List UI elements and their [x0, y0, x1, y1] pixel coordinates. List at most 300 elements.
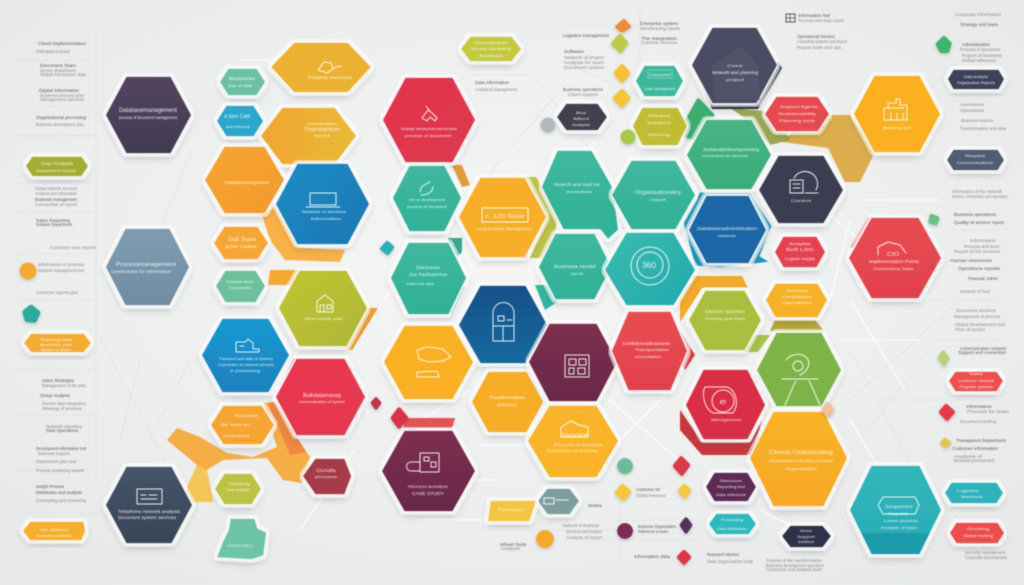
small hexagon: cyan lower — [708, 513, 757, 535]
hexagon: red with target icon: Management — [711, 418, 741, 422]
text block: left column lower: Data Operations — [46, 428, 79, 433]
small hexagon: dark centre — [556, 103, 608, 131]
hexagon: dark slate — [691, 27, 778, 104]
text block: top centre notes: Logistics management — [563, 33, 610, 38]
hexagon: green — [686, 119, 772, 190]
small hexagon: cyan — [216, 105, 264, 137]
text block: left column lower: Forecasting and monitoring — [36, 498, 87, 503]
text block: bottom centre notes: Connection and analysis team — [766, 567, 823, 572]
text block: left column upper: Document Team — [40, 63, 76, 68]
text block: right column middle: Plan of action — [955, 327, 986, 332]
back layer: dark base of slate hexagon — [698, 62, 782, 109]
text block: right column lower: Corporate Development — [965, 555, 1008, 560]
hexagon: orange middle: Advisory — [497, 403, 517, 407]
text block: top centre notes: The Integration — [641, 36, 678, 41]
small hexagon: right slate — [946, 149, 1005, 171]
small hexagon: right red upper: Sales — [969, 372, 984, 376]
small hexagon: dark navy — [781, 525, 832, 548]
text block: left column lower: Process monitoring reports — [36, 468, 84, 473]
small hexagon: lime: Data analysis — [226, 488, 250, 492]
icon: scissors — [422, 106, 437, 121]
hexagon: slate — [105, 228, 190, 306]
hexagon: dark purple: Databasemanagement — [119, 108, 177, 114]
icon: home — [236, 339, 259, 352]
text block: bottom centre notes: Reference to team — [638, 529, 668, 534]
hexagon: teal lower middle: text — [571, 272, 583, 276]
hexagon: plum with device icon — [528, 323, 618, 402]
hexagon: gold second: Transaction — [304, 127, 340, 133]
back layer: orange band under blue hexagon — [262, 205, 345, 262]
text block: top right notes: Process of document — [960, 47, 1001, 52]
icon: house — [317, 295, 333, 312]
hexagon: slate: Processmanagement — [116, 262, 177, 268]
icon: board — [137, 489, 162, 504]
hexagon: green: connections for services — [702, 154, 748, 158]
small hexagon: teal upper: Consumer — [649, 72, 672, 77]
hexagon: yellow with building icon — [853, 75, 941, 153]
hexagon: red: communication of system — [299, 400, 345, 404]
hexagon: red with target icon — [685, 369, 766, 440]
text block: bottom centre notes: Process of the transformation — [766, 558, 823, 563]
hexagon: navy with icon: Telephone network analysis — [118, 509, 181, 514]
hexagon: plum bottom — [381, 430, 476, 512]
small hexagon: lime top: Service Monitoring — [471, 47, 511, 51]
text block: bottom centre notes: Business development operation — [766, 563, 825, 568]
text block: right column upper: Operations — [960, 108, 984, 113]
text block: right column upper: Service connection and operation — [952, 194, 1009, 199]
icon: chart box top right — [786, 14, 795, 22]
text block: left column middle: Consumer reports plan — [36, 290, 79, 295]
hexagon: teal large bottom right: Sequence — [885, 504, 914, 509]
small hexagon: red middle: Bolt LSG — [786, 247, 815, 252]
text block: top right notes: Strategy and team — [960, 22, 998, 27]
hexagon: cyan target — [604, 232, 696, 306]
text block: right column upper: Information of the network — [952, 189, 1003, 194]
text block: top centre notes: Business operations — [563, 87, 604, 92]
hexagon: large orange: Check Outstanding — [769, 450, 833, 456]
text block: left column upper: Global transaction data — [40, 72, 87, 77]
text block: left column upper: Organizational processing — [36, 115, 86, 120]
text block: right column lower: Document tracking — [960, 419, 997, 424]
small hexagon: red top: Sustainability — [778, 111, 816, 116]
back layer: cyan strip behind blue hexagon — [683, 192, 772, 268]
small hexagon: left orange lower: Business network — [36, 534, 73, 538]
small hexagon: dark red: process — [315, 474, 337, 479]
hexagon: bright blue with home icon: Transport and data of delivery — [219, 357, 273, 361]
hexagon: blue with laptop icon: information — [311, 217, 341, 221]
small hexagon: left orange upper: Model of team — [41, 348, 72, 352]
icon: device — [565, 355, 589, 377]
text block: right column middle: Financial, Admin — [968, 276, 998, 281]
text block: left column upper — [36, 41, 87, 127]
icon: target — [703, 387, 736, 413]
hexagon: teal with icon — [392, 165, 462, 232]
back layer: green hexagon behind — [684, 97, 715, 142]
small hexagon: red middle: Anaylsis — [789, 242, 812, 246]
text block: top centre notes: Network of project — [564, 55, 605, 60]
text block: top right notes: Operational Service — [797, 34, 835, 39]
text block: left column lower: Management of the plan — [42, 383, 87, 388]
text block: top centre notes: Software — [564, 49, 584, 54]
hexagon: coral: Transportation — [635, 348, 669, 352]
small hexagon: teal: Business — [229, 76, 256, 81]
hexagon: teal tall: Search and tool ins — [554, 182, 601, 187]
small hexagon: left lime: Department reports — [36, 169, 76, 173]
small hexagon: cyan lower: Data distribution — [717, 527, 747, 531]
text block: right column upper: Assessment — [960, 102, 985, 107]
text block: left column upper: Business development plan — [36, 122, 85, 127]
hexagon: coral: ConfidenceBusiness — [622, 341, 671, 346]
text block: top centre notes: Data information — [475, 80, 509, 85]
text block: left column lower: Network reporting — [46, 424, 83, 429]
hexagon: yellow-green: Electric Solution — [705, 309, 746, 314]
hexagon: navy blue with plan icon — [458, 285, 548, 364]
hexagon: blue right: network — [718, 234, 736, 238]
text block: bottom centre notes: Research Metrics — [707, 552, 740, 557]
small hexagon: orange: Ddit Team — [228, 237, 256, 243]
text block: left column middle: Customer care reports — [50, 245, 96, 250]
icon: house outline — [878, 242, 906, 255]
hexagon: green: Sustainabledevelopmenting — [703, 147, 759, 152]
small hexagon: green — [215, 270, 266, 303]
text block: top centre notes: Document system — [564, 65, 605, 70]
hexagon: gold second: connection — [307, 121, 337, 126]
hexagon: orange: Databasemanagement — [225, 180, 270, 185]
small hexagon: right slate: Request — [965, 153, 986, 158]
text block: left column middle: Global network services — [35, 186, 77, 191]
text block: left column middle — [35, 186, 96, 295]
small hexagon: olive: Market — [648, 114, 670, 118]
hexagon: gold second: text — [314, 134, 332, 138]
small hexagon: olive: Planning — [648, 133, 670, 137]
back layer: dark red strip behind red hexagon — [275, 358, 306, 405]
small hexagon: red top: Planning tools — [779, 119, 815, 123]
text block: right column middle: Global development tool — [955, 322, 1005, 327]
small hexagon: teal upper: Data management — [645, 87, 675, 91]
hexagon: gold top — [270, 42, 372, 93]
hexagon: gold top: Property resources — [308, 75, 352, 80]
text block: left column lower: Strategy of process — [42, 406, 82, 411]
text block: bottom centre notes: Customer Inf — [636, 487, 661, 492]
text block: top right notes — [797, 12, 1002, 63]
text block: top centre notes: Client support — [568, 92, 599, 97]
hexagon: plum bottom: CASE STUDY — [412, 491, 444, 496]
hexagon: cyan target: 360 — [642, 261, 657, 270]
text block: right column middle: Communication network — [960, 346, 1007, 351]
small hexagon: right red lower: Global tracking — [963, 534, 993, 538]
text block: top right notes: Corporate information — [955, 12, 1002, 17]
hexagon: navy with icon — [105, 466, 193, 544]
hexagon: red top centre: process of document — [405, 134, 451, 138]
hexagon: dark with machine icon — [758, 155, 844, 224]
hexagon: teal lower: Internal ops — [406, 282, 434, 286]
text block: left column lower: Service data integration — [42, 401, 87, 406]
hexagon: coral: consultation — [635, 355, 661, 359]
hexagon: dark purple — [105, 76, 192, 154]
small hexagon: orange: sche Linker — [225, 244, 258, 249]
hexagon: lime with house icon: Real estate plan — [305, 316, 343, 321]
text block: right column lower: Process for team — [967, 409, 1010, 414]
small hexagon: right dark: Organization Reports — [957, 81, 995, 85]
text block: top centre notes: Analytical management — [475, 87, 518, 92]
text block: left column upper: Server department — [40, 68, 77, 73]
hexagon: yellow-green: Process and Plant — [705, 317, 745, 321]
hexagon: teal lower: Disclosure — [416, 265, 441, 270]
small hexagon: right dark — [947, 69, 1005, 90]
hexagon: orange — [204, 146, 285, 214]
hexagon: orange centre with rectangle: Local Analysis Management — [476, 226, 533, 231]
hexagon: yellow-green — [688, 290, 762, 351]
text block: right column middle: Network of fund — [960, 289, 991, 294]
hexagon: teal large bottom right: Lorem process — [884, 519, 918, 523]
text block: right column upper: Transformation and data — [960, 126, 1007, 131]
text block: left column upper: Digital Information — [39, 88, 79, 93]
hexagon: large orange — [749, 411, 848, 507]
back layer: orange lime strips around yellow-green hexagon — [680, 276, 824, 370]
hexagon: red — [275, 358, 366, 436]
small hexagon: green: Finance Adm — [226, 279, 255, 284]
small hexagon: dark navy: Service — [800, 529, 812, 533]
small hexagon: yellow: Operations — [782, 301, 813, 305]
small hexagon: orange outline — [210, 405, 275, 445]
hexagon: orange middle — [471, 371, 544, 433]
text block: right column lower: Information — [966, 404, 992, 409]
icon: form — [406, 453, 439, 472]
label: yellow tag — [487, 500, 537, 522]
hexagon: navy with icon: Document system services — [118, 515, 177, 520]
text block: left column middle: Business management — [35, 197, 78, 202]
small hexagon: red middle: Logistic supply — [785, 257, 815, 261]
text block: right column upper — [952, 102, 1009, 225]
text block: bottom centre notes: Analysis — [500, 546, 520, 551]
text block: top right notes: Report tools and ops — [797, 45, 841, 50]
small hexagon: dark red — [302, 458, 352, 495]
text block: right column middle: Support and connection — [958, 350, 1006, 355]
back layer: gold connector behind teal hexagon — [452, 165, 470, 187]
text block: right column middle: Information — [970, 238, 997, 243]
text block: right column middle — [950, 238, 1007, 355]
text block: bottom centre notes: Notes — [588, 503, 603, 508]
text block: top right notes: Report of business — [962, 53, 1002, 58]
hexagon: teal with icon: Fer or development — [409, 197, 446, 202]
icon: laptop — [306, 193, 340, 207]
text block: right column lower — [952, 404, 1010, 560]
small hexagon: dark centre: Bus — [576, 111, 587, 115]
text block: bottom centre notes: Analysis of report — [566, 535, 603, 540]
hexagon: dark slate: Network and planning — [712, 70, 759, 75]
hexagon: teal right: report — [650, 198, 666, 202]
text block: top right notes: Process and data report — [798, 18, 845, 23]
text block: right column middle: Process and team — [964, 244, 1001, 249]
small hexagon: dark navy: Support — [797, 535, 815, 539]
text block: left column lower — [36, 378, 87, 503]
small hexagon: olive — [632, 107, 688, 146]
hexagon: red with target icon: e — [720, 399, 727, 406]
small hexagon: right cyan: Logistics — [957, 489, 979, 493]
small hexagon: dark centre: Afford — [573, 117, 589, 121]
back layer: translucent orange arrow shape — [167, 402, 310, 502]
small hexagon: plum: Data reference — [716, 493, 746, 497]
back layer: red strip — [403, 418, 455, 428]
text block: left column lower: Development information tool — [36, 446, 86, 451]
hexagon: blue right: Databaseadministration — [697, 226, 758, 231]
hexagon: teal large bottom right: Analysis of team — [881, 526, 917, 530]
small hexagon: red top — [764, 96, 830, 132]
hexagon: yellow with building icon: Building ops — [883, 126, 911, 130]
text block: left column lower: Insight Process — [36, 484, 65, 489]
small hexagon: right red lower — [949, 522, 1005, 544]
small hexagon: left lime — [25, 156, 89, 177]
text block: right column lower: Transparent Department — [956, 438, 1007, 443]
text block: bottom centre notes: Global resources — [636, 493, 666, 498]
small hexagon: lime top: Connection — [474, 41, 508, 45]
small hexagon: cyan: d Stee Cabl — [224, 114, 250, 120]
text block: top centre notes: Manufacturing reports — [640, 26, 680, 31]
small hexagon: left orange lower — [22, 521, 86, 541]
small hexagon: red middle — [774, 236, 826, 268]
hexagon: teal with icon: process of document — [407, 205, 447, 209]
icon: frame — [482, 208, 528, 222]
hexagon: lime with house icon — [278, 270, 368, 347]
hexagon: bright blue with home icon: in processing — [230, 369, 260, 373]
text block: top centre notes: Customer overview — [641, 40, 678, 45]
text block: left column lower: Sales Strategies — [42, 378, 75, 383]
back layer: teal strip behind navy hexagon — [448, 238, 560, 320]
small hexagon: lime — [214, 473, 262, 505]
icon: tag outline — [878, 497, 919, 514]
text block: right column upper: Business reports — [961, 118, 993, 123]
small hexagon: teal — [219, 68, 266, 96]
small hexagon: dark red: Grids — [316, 468, 337, 473]
hexagon: teal large bottom right — [849, 465, 942, 555]
icon: floor plan — [493, 302, 514, 341]
small hexagon: right slate: Communications — [957, 161, 993, 165]
small hexagon: right red lower: Growing — [967, 527, 989, 531]
text block: right column lower: Security Assessment — [965, 550, 1006, 555]
small hexagon: lime: Tracking — [228, 482, 250, 486]
hexagon: bright blue with home icon — [201, 318, 290, 393]
small hexagon: slate — [537, 488, 580, 515]
icon: outline map — [417, 347, 451, 377]
small hexagon: teal upper — [635, 65, 684, 97]
small hexagon: green: Corporate — [229, 285, 252, 290]
small hexagon: left orange upper: Business plan — [40, 343, 72, 347]
text block: right column lower: Business process tool — [954, 458, 994, 463]
small hexagon: right cyan — [944, 482, 1004, 504]
hexagon: yellow with outline icon — [383, 325, 474, 400]
shape: teal blob — [216, 518, 267, 560]
small hexagon: plum: Reporting tool — [717, 485, 745, 489]
text block: top centre notes: Enterprise system — [640, 21, 678, 26]
text block: bottom centre notes: Network of Business — [563, 523, 599, 528]
small hexagon: orange outline: The Ackson — [234, 413, 258, 418]
hexagon: yellow lower centre: Process of analysis — [554, 443, 602, 447]
text block: left column middle: Network management tool — [38, 268, 84, 273]
hexagon: red: Bulkdatamanag — [303, 393, 341, 399]
small hexagon: yellow: Service — [786, 289, 808, 293]
hexagon: coral — [611, 311, 688, 391]
hexagon: large orange: measurement of data and tools — [769, 458, 833, 463]
text block: right column middle: Operations reports — [958, 266, 1001, 271]
text block: left column lower: Business Support — [38, 451, 71, 456]
hexagon: teal lower middle — [538, 233, 612, 300]
text block: left column upper: Cloud Implementation — [38, 41, 86, 46]
icon: machine — [790, 171, 818, 193]
hexagon: teal lower: Our Radioservice — [409, 272, 448, 277]
small hexagon: plum: Disclosure — [720, 479, 742, 483]
hexagon: teal tall — [541, 150, 619, 240]
hexagon: gold second — [260, 107, 357, 165]
back layer: orange stripes left of lime hexagon — [268, 270, 300, 285]
text block: left column middle: Information of process — [38, 262, 84, 267]
hexagon: orange centre with rectangle — [458, 177, 558, 258]
back layer: orange stripes right of lime hexagon — [345, 308, 378, 350]
text block: left column upper: Infrastructure — [36, 49, 71, 54]
small hexagon: red top: Support Agents — [780, 105, 818, 109]
small hexagon: right red upper: Program updates — [959, 385, 993, 389]
small hexagon: cyan: services — [226, 125, 250, 129]
text block: bottom centre notes — [500, 487, 825, 572]
back layer: gold translucent hexagons — [730, 108, 875, 182]
text block: right column middle: Document services — [956, 308, 996, 313]
small hexagon: yellow — [765, 283, 828, 318]
label: yellow tag: Premium — [498, 507, 525, 512]
small hexagon: left lime: Gap Analysis — [41, 161, 74, 166]
small hexagon: lime top — [460, 36, 522, 62]
hexagon: teal tall: connections — [566, 190, 592, 194]
hexagon: teal lower — [390, 242, 467, 315]
text block: bottom centre notes: Services and project — [566, 529, 603, 534]
hexagon: bright blue with home icon: Connection of network services — [218, 363, 274, 367]
text block: bottom centre notes: Data Organization tools — [707, 559, 753, 564]
text block: top right notes: Administration — [962, 42, 990, 47]
hexagon: green with swirl icon — [756, 332, 842, 407]
hexagon: slate: connections for information — [111, 269, 172, 274]
hexagon: dark slate: project — [726, 78, 744, 82]
text block: left column middle: Solution Department — [36, 222, 73, 227]
text block: bottom centre notes: Information data — [634, 554, 670, 559]
hexagon: large orange: Organization — [785, 467, 817, 471]
text block: right column middle: Report of the services — [954, 249, 1000, 254]
small hexagon: left orange upper: Tracking data — [40, 338, 72, 342]
small hexagon: right red upper — [948, 371, 1004, 392]
small hexagon: yellow: Consultation — [782, 295, 812, 299]
small hexagon: cyan lower: Processing — [721, 518, 743, 522]
hexagon: dark with machine icon: Control — [791, 199, 811, 203]
text block: left column middle: Analysis and information — [35, 191, 78, 196]
hexagon: dark purple: process of document management — [119, 115, 178, 120]
hexagon: large red right — [848, 217, 942, 299]
hexagon: teal right — [611, 160, 696, 230]
icon: building — [884, 99, 907, 120]
small hexagon: right dark: Data Analysis — [964, 75, 988, 79]
text block: right column upper: Business operations — [954, 212, 997, 217]
text block: right column lower: Analysis of — [954, 454, 983, 459]
icon: swirl — [782, 354, 820, 405]
text block: left column middle: Sales Reporting — [36, 218, 70, 223]
hexagon: orange middle: Transformation — [489, 395, 526, 400]
text block: left column middle: Connection of report — [35, 202, 78, 207]
icon: rings — [631, 247, 669, 285]
shape: teal blob: GOSS PROJ — [227, 543, 253, 548]
small hexagon: olive: Solutions — [647, 121, 671, 125]
hexagon: blue with laptop icon: Network of services — [302, 209, 346, 214]
hexagon: red top centre — [382, 77, 476, 163]
text block: top right notes: Information Net — [798, 13, 831, 18]
small hexagon: orange outline: Consultant — [223, 434, 250, 438]
text block: top centre notes — [475, 21, 680, 97]
text block: left column lower: Department plan tool — [36, 459, 76, 464]
